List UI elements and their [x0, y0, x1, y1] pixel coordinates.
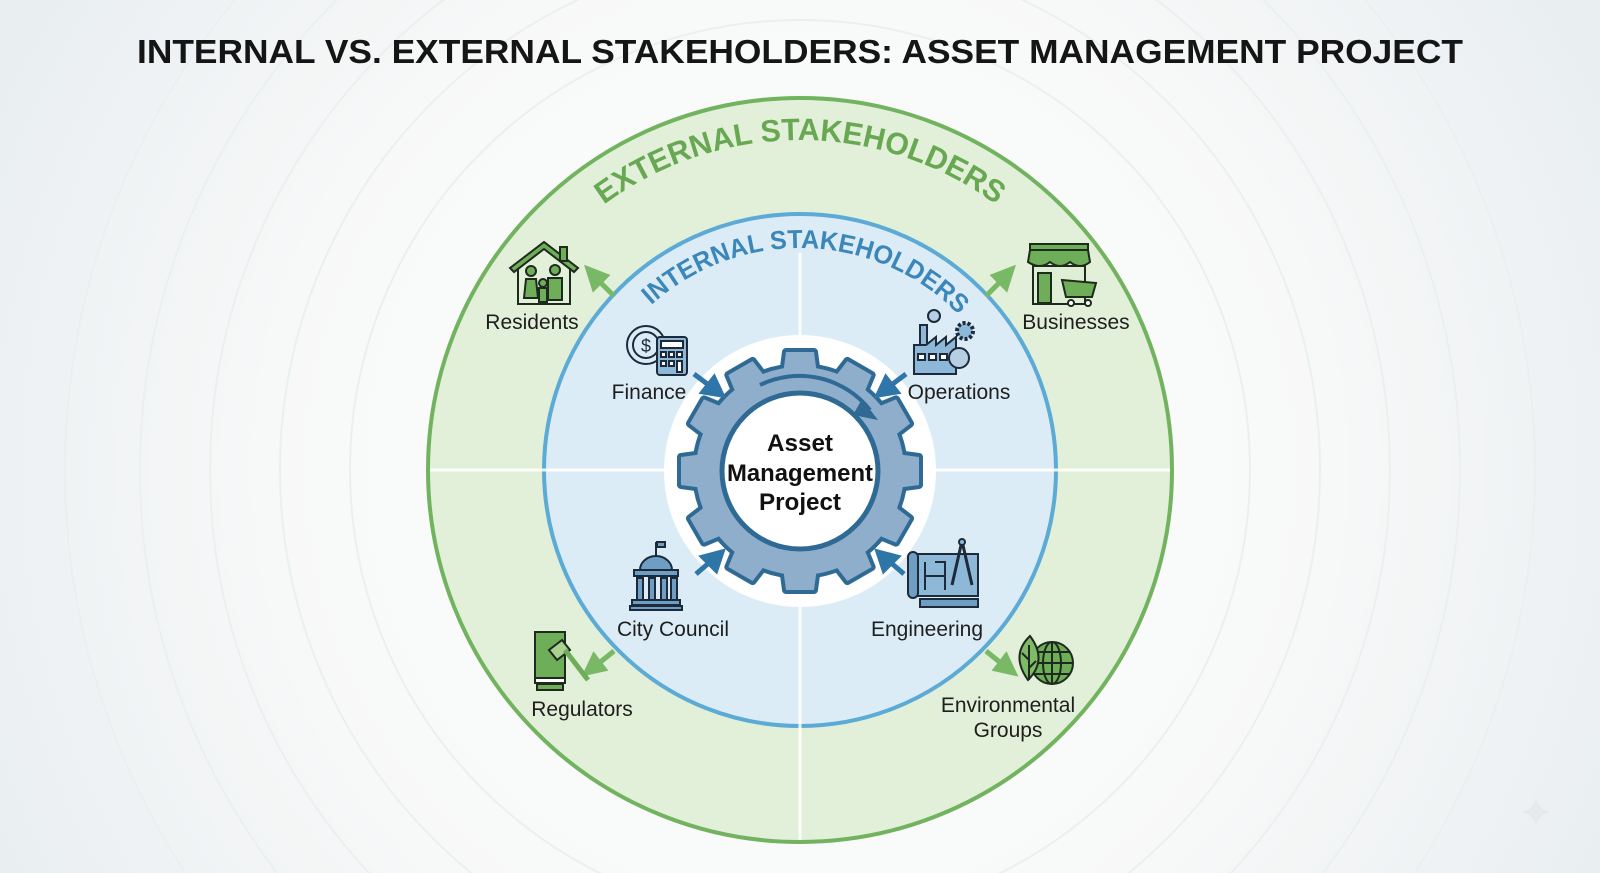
icon: residents house	[510, 242, 578, 304]
icon: sparkle	[1521, 796, 1551, 828]
label: regulators: Regulators	[531, 698, 633, 721]
icon: environmental leaf and globe	[1019, 636, 1073, 684]
icon: finance	[627, 326, 687, 375]
gear: asset management project	[681, 352, 919, 590]
label: operations: Operations	[908, 381, 1010, 404]
label: environmental groups: Environmental	[941, 694, 1075, 717]
icon: city council	[630, 542, 682, 610]
heading: internal stakeholders: INTERNAL STAKEHOLDERS	[640, 230, 968, 312]
panel: internal stakeholders ring	[542, 212, 1058, 728]
title: INTERNAL VS. EXTERNAL STAKEHOLDERS: ASSET MANAGEMENT PROJECT	[137, 33, 1463, 70]
icon: finance: $	[641, 336, 651, 356]
center halo	[664, 335, 936, 607]
label: businesses: Businesses	[1022, 311, 1130, 334]
label: residents: Residents	[485, 311, 579, 334]
label: city council: City Council	[617, 618, 729, 641]
icon: engineering blueprint	[908, 539, 978, 607]
curved arrow in gear	[760, 376, 878, 420]
heading: external stakeholders: EXTERNAL STAKEHOLDERS	[593, 118, 1005, 204]
icon: operations factory	[914, 310, 973, 374]
center text: Project	[759, 489, 841, 516]
icon: regulators book and gavel	[535, 632, 588, 690]
arrows: green outward	[586, 269, 1014, 673]
label: finance: Finance	[612, 381, 686, 404]
center text: Asset	[767, 430, 833, 457]
icon: businesses store	[1028, 244, 1096, 306]
center text: Management	[727, 460, 873, 487]
arrows: blue inward	[694, 374, 906, 574]
label: environmental groups: Groups	[974, 719, 1042, 742]
label: engineering: Engineering	[871, 618, 983, 641]
